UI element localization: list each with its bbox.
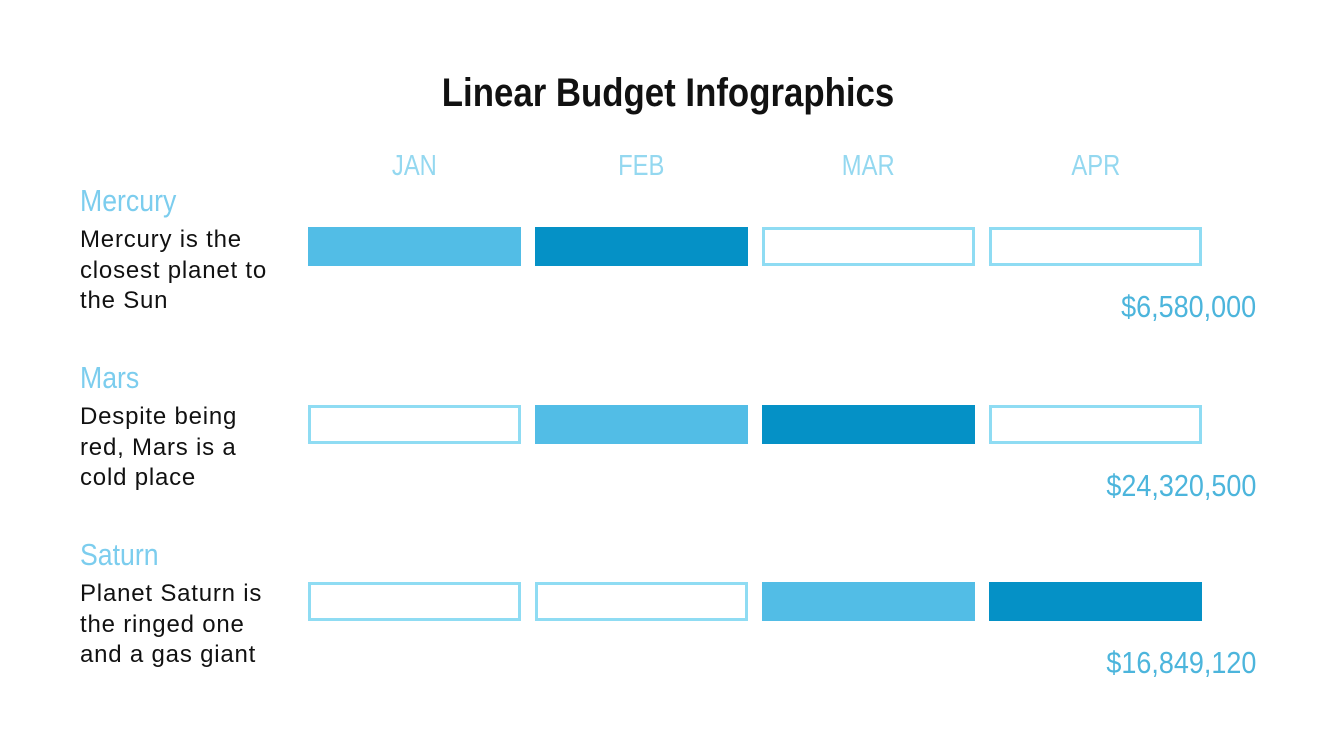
bar JAN [308, 227, 521, 266]
heading: Mars: Mars [80, 360, 139, 395]
month: APR: APR [1071, 150, 1120, 182]
text: Mars description [80, 403, 237, 491]
amount: $16,849,120 [1106, 645, 1256, 680]
text: Mercury description: closest planet to [80, 256, 267, 284]
month: MAR: MAR [842, 150, 895, 182]
row: Mercury [80, 183, 1256, 324]
month: JAN: JAN [392, 150, 437, 182]
text: Saturn description: and a gas giant [80, 641, 256, 668]
bar FEB [535, 582, 748, 621]
bar MAR [762, 405, 975, 444]
bar JAN [308, 582, 521, 621]
bar FEB [535, 405, 748, 444]
text: Mercury description: the Sun [80, 287, 168, 314]
bar JAN [308, 405, 521, 444]
heading: Mercury: Mercury [80, 183, 176, 218]
text: Saturn description [80, 580, 262, 668]
text: Mercury description [80, 226, 267, 314]
title: Linear Budget Infographics [442, 71, 894, 115]
bar APR [989, 405, 1202, 444]
bar MAR [762, 227, 975, 266]
text: Mars description: cold place [80, 464, 196, 491]
row: Mars [80, 360, 1256, 503]
text: Saturn description: Planet Saturn is [80, 580, 262, 607]
text: Mercury description: Mercury is the [80, 226, 242, 253]
amount: $6,580,000 [1121, 289, 1256, 324]
bar APR [989, 582, 1202, 621]
bar MAR [762, 582, 975, 621]
text: Saturn description: the ringed one [80, 610, 245, 638]
text: Mars description: Despite being [80, 403, 237, 430]
row: Saturn [80, 537, 1256, 680]
heading: Saturn: Saturn [80, 537, 159, 572]
bar FEB [535, 227, 748, 266]
bar APR [989, 227, 1202, 266]
amount: $24,320,500 [1106, 468, 1256, 503]
text: Mars description: red, Mars is a [80, 434, 237, 460]
month: FEB: FEB [618, 150, 665, 182]
